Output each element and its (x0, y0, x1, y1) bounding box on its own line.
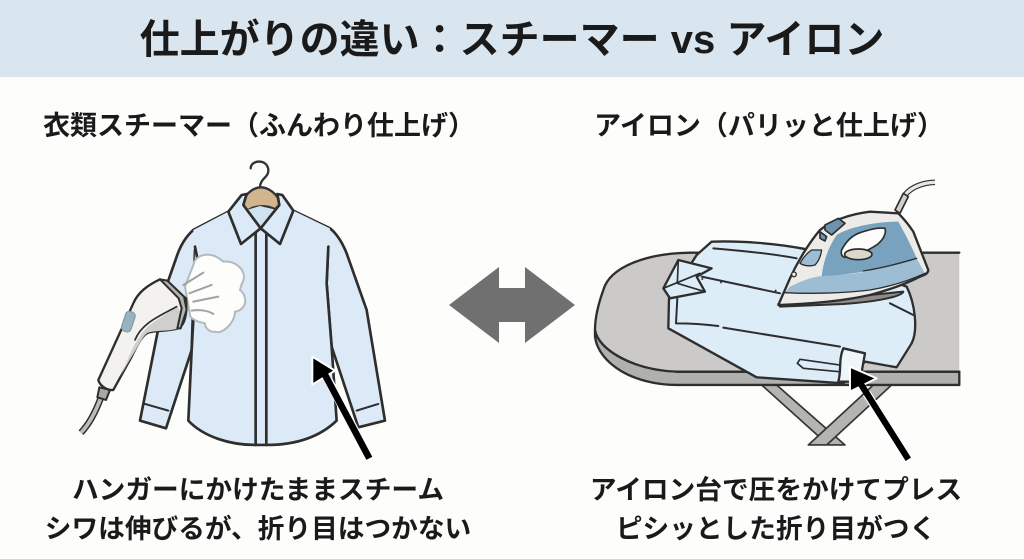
icon: board legs (762, 385, 892, 445)
caption: steamer (45, 475, 471, 544)
heading: garment steamer: 衣類スチーマー（ふんわり仕上げ） (43, 111, 475, 141)
illustration: shirt on hanger with steamer (81, 162, 385, 458)
caption: iron: アイロン台で圧をかけてプレス (590, 475, 962, 505)
placket buttons (701, 278, 777, 292)
shirt (140, 194, 385, 445)
double-headed arrow (449, 267, 575, 343)
ironing board (595, 253, 959, 385)
title banner: 仕上がりの違い：スチーマー vs アイロン (140, 18, 884, 62)
steam cloud (183, 255, 245, 332)
caption: iron (590, 475, 962, 544)
icon: handheld steamer (81, 279, 187, 433)
caption: iron: ピシッとした折り目がつく (616, 514, 936, 544)
icon: hanger (241, 162, 281, 211)
folded shirt (663, 241, 915, 383)
title banner (0, 0, 1024, 77)
caption: steamer: シワは伸びるが、折り目はつかない (45, 514, 471, 544)
heading: iron: アイロン（パリッと仕上げ） (594, 111, 944, 141)
caption: steamer: ハンガーにかけたままスチーム (72, 475, 444, 505)
arrow: pointing to sleeve crease (850, 367, 908, 459)
arrow: pointing to shirt body (312, 357, 369, 458)
icon: steam iron (778, 182, 935, 307)
illustration: shirt on ironing board with iron (595, 182, 959, 459)
